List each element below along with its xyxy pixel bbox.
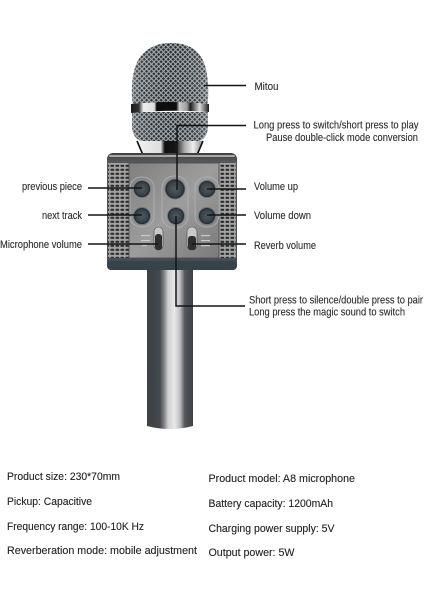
left labels — [0, 181, 83, 251]
microphone — [107, 40, 237, 429]
buttons — [134, 179, 216, 224]
right labels: Long press the magic sound to switch — [249, 306, 405, 318]
left labels: next track — [42, 210, 83, 222]
specifications right column — [208, 473, 355, 559]
right labels: Reverb volume — [254, 240, 316, 252]
right labels: Volume down — [254, 210, 311, 222]
specifications left column: Product size: 230*70mm — [7, 471, 120, 483]
left labels: previous piece — [22, 181, 82, 193]
neck collar — [137, 141, 203, 155]
right labels: Volume up — [254, 181, 298, 193]
right labels: Mitou — [254, 81, 279, 93]
sliders — [154, 227, 197, 250]
control body — [107, 153, 237, 270]
callout lines — [88, 86, 246, 306]
slider marks — [141, 235, 210, 246]
left labels: Microphone volume — [0, 239, 82, 251]
handle — [147, 268, 193, 429]
specifications left column: Reverberation mode: mobile adjustment — [7, 545, 198, 557]
grille head — [132, 43, 208, 141]
right labels — [249, 81, 423, 318]
specifications left column: Pickup: Capacitive — [7, 496, 92, 508]
specifications left column: Frequency range: 100-10K Hz — [7, 521, 144, 533]
specifications right column: Output power: 5W — [208, 547, 295, 559]
button outlines — [130, 176, 219, 228]
specifications right column: Product model: A8 microphone — [208, 473, 355, 485]
specifications right column: Charging power supply: 5V — [208, 523, 335, 535]
specifications right column: Battery capacity: 1200mAh — [208, 498, 333, 510]
specifications left column — [7, 471, 198, 557]
chrome ring — [131, 102, 209, 113]
